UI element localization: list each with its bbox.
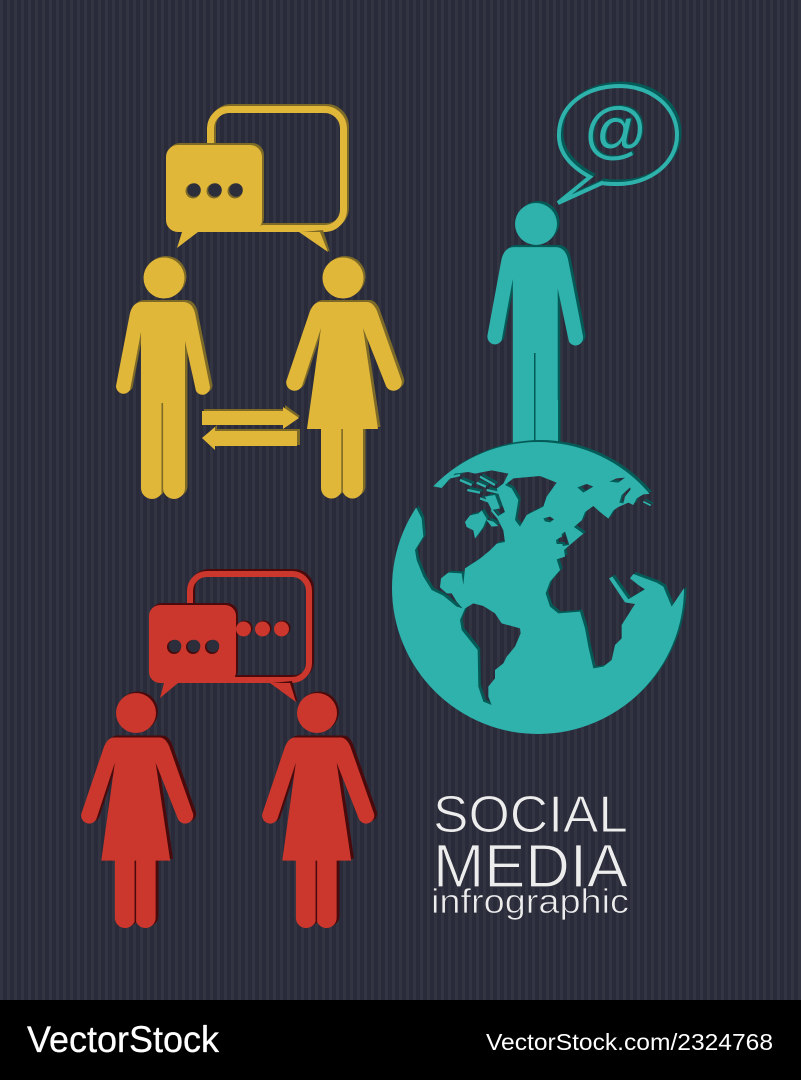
at sign: @ (585, 95, 649, 165)
title: social media infrographic: infrographic (431, 883, 629, 921)
exchange arrows (202, 405, 300, 450)
speech bubbles: yellow pair (166, 108, 346, 252)
solid chat dots (236, 620, 290, 636)
title: social media infrographic: SOCIAL (433, 786, 628, 844)
title: social media infrographic: MEDIA (433, 832, 628, 900)
title: social media infrographic (431, 786, 629, 921)
footer bar (0, 1000, 801, 1080)
footer url: VectorStock.com/2324768 (486, 1029, 773, 1055)
chat dots (186, 183, 243, 198)
yellow woman figure (286, 256, 404, 499)
teal man figure (487, 201, 586, 456)
footer logo: VectorStock (27, 1019, 219, 1060)
red woman figure left (81, 692, 196, 928)
teal email speech bubble (558, 84, 680, 203)
speech bubbles: red pair (149, 572, 311, 702)
teal globe with continents (392, 440, 686, 734)
yellow man figure (116, 256, 213, 499)
hollow chat dots (167, 640, 219, 654)
at sign: @ (584, 96, 647, 166)
red woman figure right (262, 692, 377, 928)
